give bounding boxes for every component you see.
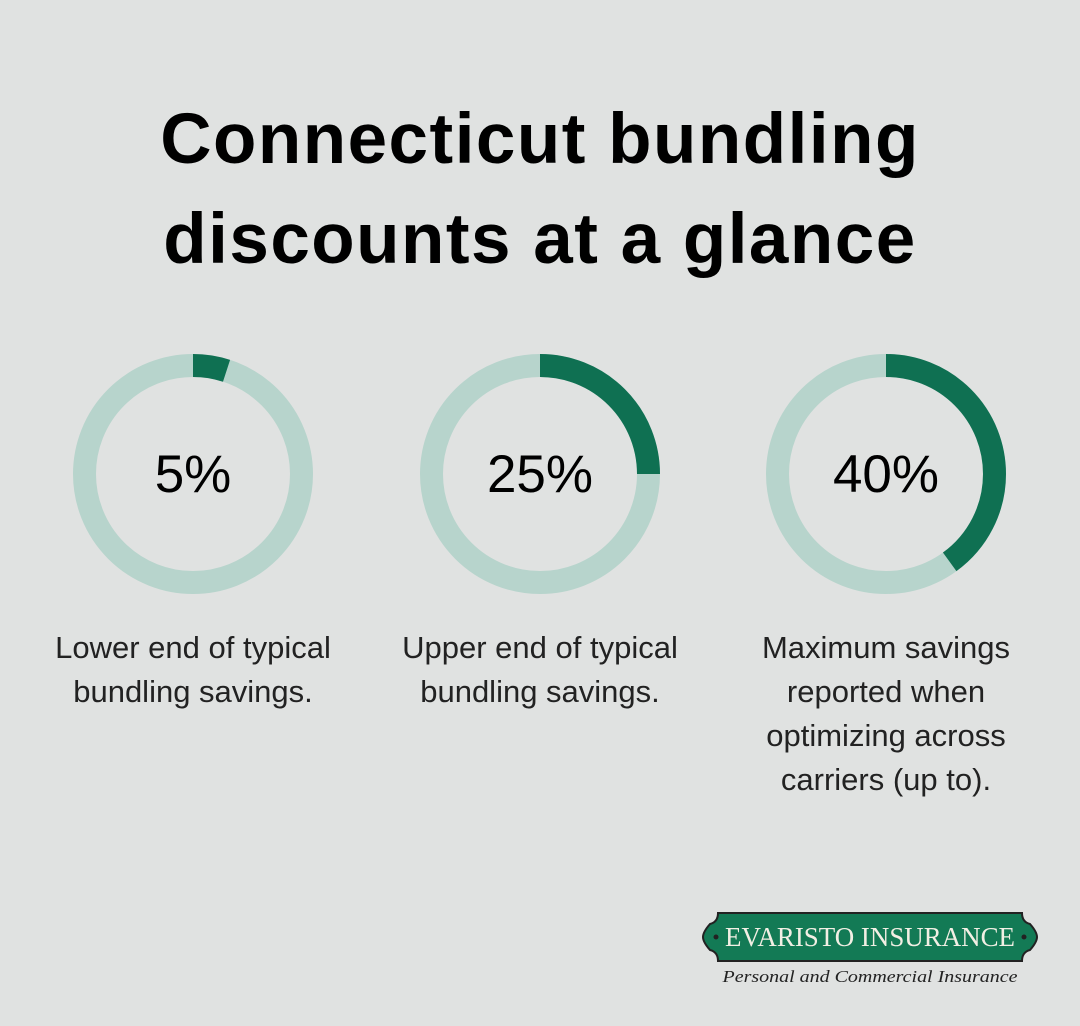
caption 1: bundling savings. xyxy=(73,674,313,709)
title: discounts at a glance xyxy=(163,200,917,279)
donut: 25%: 25% xyxy=(487,445,593,504)
title xyxy=(160,100,920,279)
caption 2: Upper end of typical xyxy=(402,630,678,665)
caption 2 xyxy=(402,630,678,709)
donut: 5% xyxy=(84,366,302,582)
caption 3: reported when xyxy=(787,674,985,709)
caption 3: Maximum savings xyxy=(762,630,1010,665)
caption 3: optimizing across xyxy=(766,718,1006,753)
caption 3 xyxy=(762,630,1010,797)
donut: 25% xyxy=(432,366,648,582)
donut charts xyxy=(73,354,1006,594)
logo xyxy=(702,912,1038,986)
title: Connecticut bundling xyxy=(160,100,920,179)
logo: Personal and Commercial Insurance xyxy=(721,967,1018,986)
logo: EVARISTO INSURANCE xyxy=(725,922,1015,952)
caption 2: bundling savings. xyxy=(420,674,660,709)
caption 1 xyxy=(55,630,331,709)
caption 3: carriers (up to). xyxy=(781,762,991,797)
donut: 5%: 5% xyxy=(155,445,231,504)
donut: 40% xyxy=(778,366,994,582)
donut: 40%: 40% xyxy=(833,445,939,504)
caption 1: Lower end of typical xyxy=(55,630,331,665)
